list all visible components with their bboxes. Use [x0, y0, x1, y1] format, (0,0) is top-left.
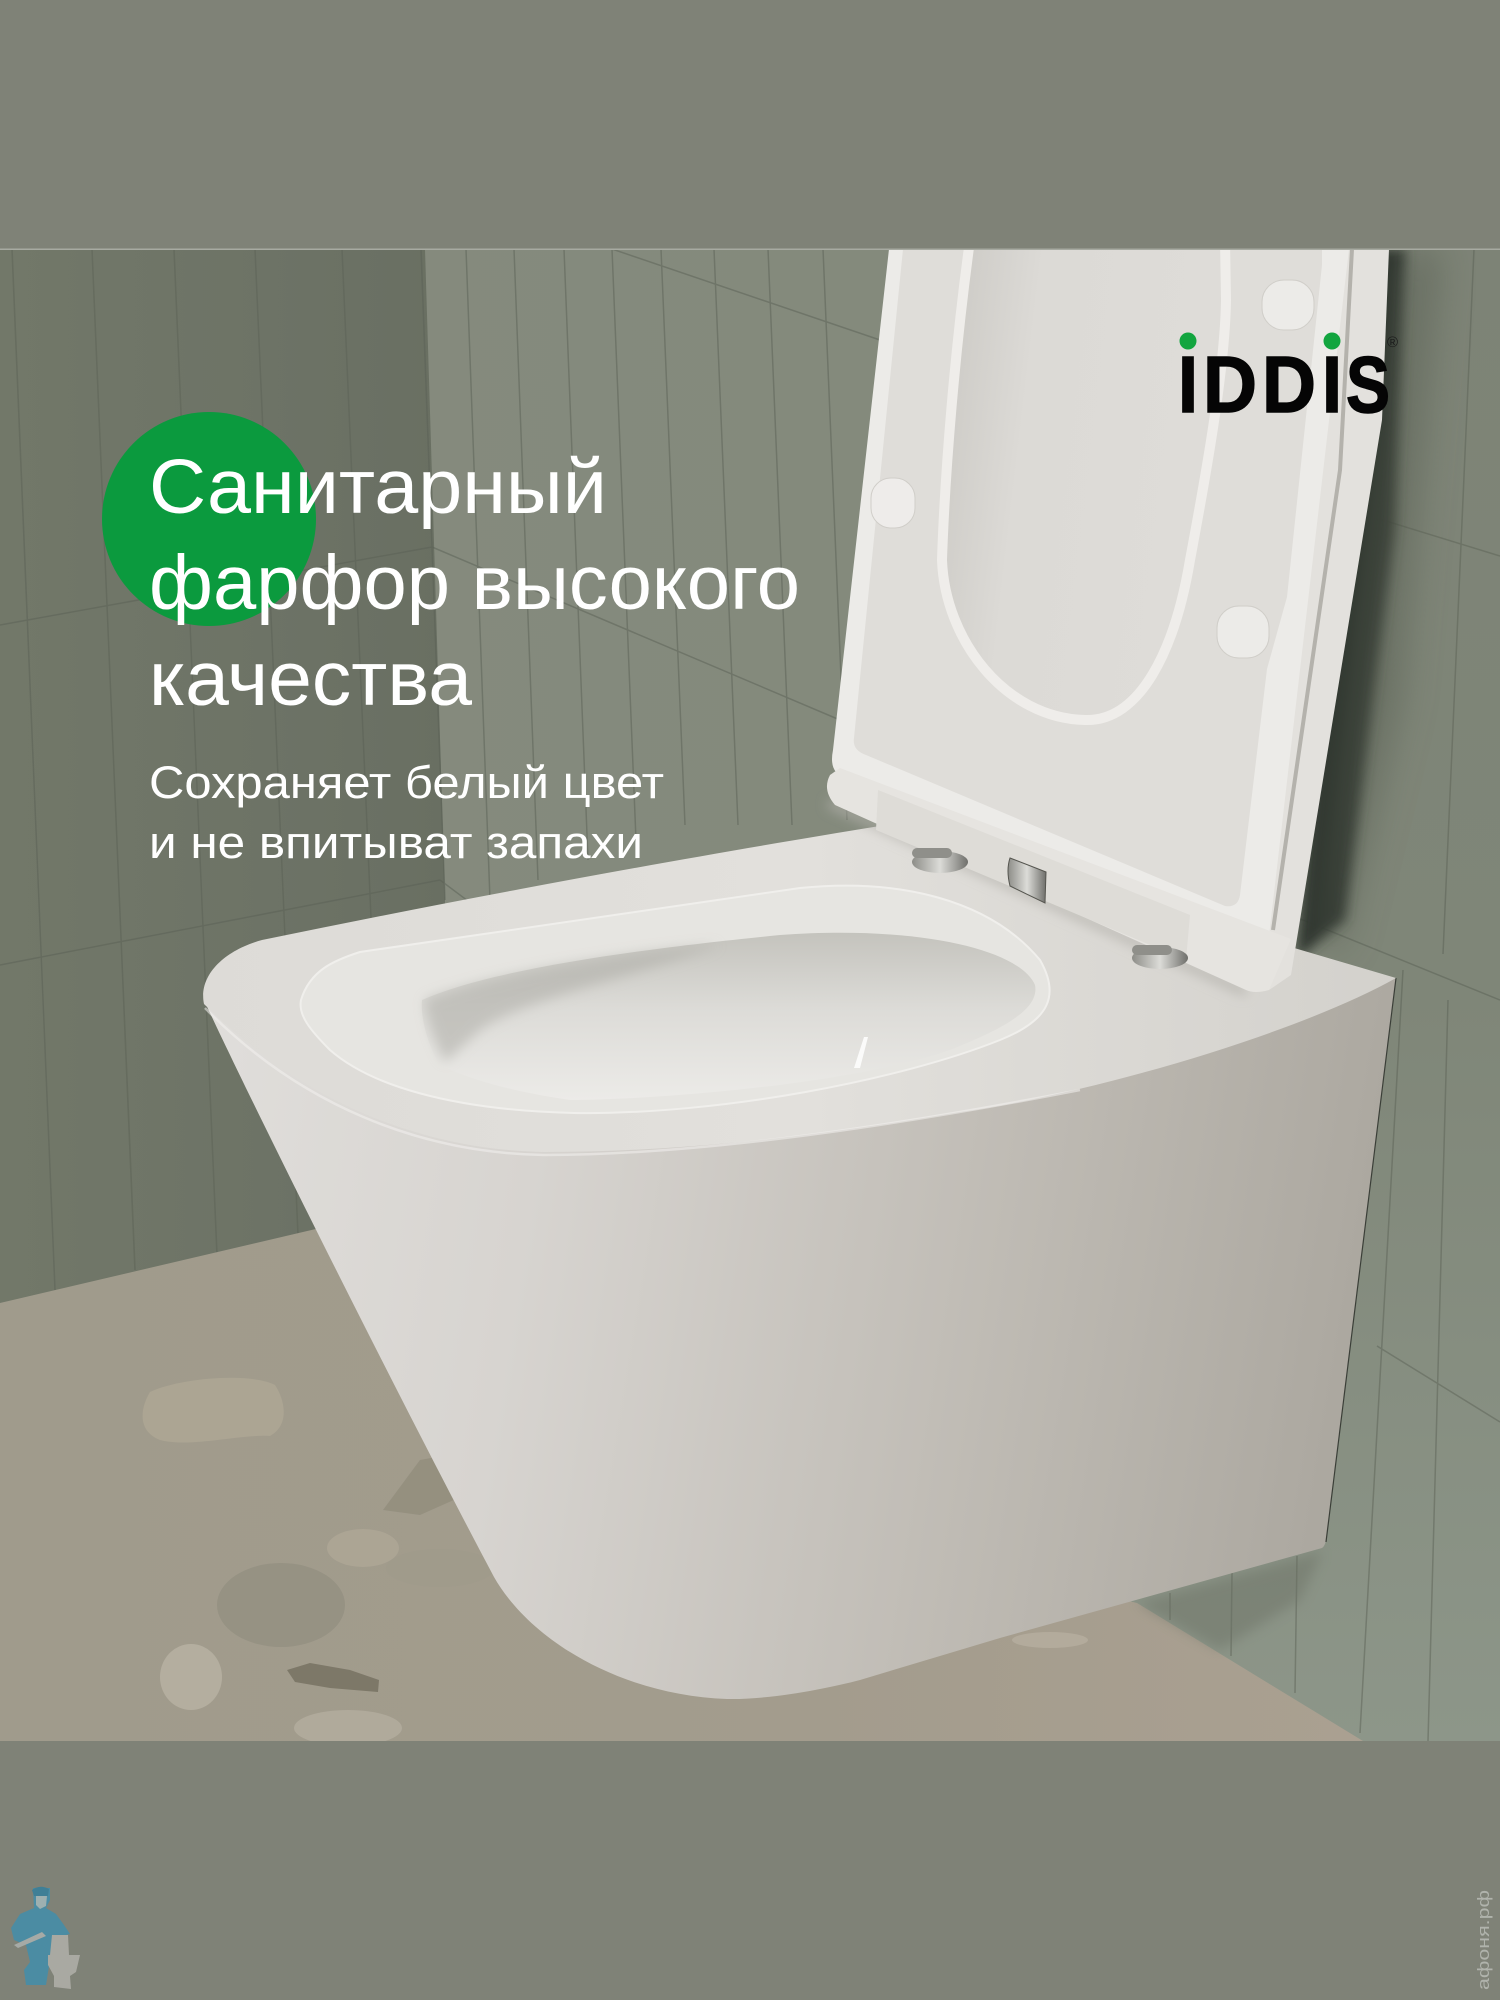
shadow behind lid [1296, 249, 1406, 960]
brand logo: I [1322, 340, 1342, 429]
bowl opening [301, 886, 1050, 1113]
green circle accent [102, 412, 316, 626]
brand logo [1178, 332, 1398, 429]
body right contour [1326, 978, 1396, 1542]
left wall in shadow [0, 249, 445, 1310]
wall tile joints [0, 249, 1500, 1741]
chrome clip [1008, 858, 1046, 903]
heading: Санитарный [149, 444, 607, 530]
scene top edge [0, 248, 1500, 250]
toilet rim [203, 826, 1396, 1152]
bottom band [0, 1741, 1500, 2000]
heading: качества [149, 636, 472, 722]
lid face [832, 249, 1349, 945]
plumber mascot icon [11, 1887, 80, 1989]
brand logo: D [1203, 340, 1257, 429]
lid bumper left [871, 478, 915, 528]
hinge bar shade [876, 790, 1190, 960]
heading: фарфор высокого [149, 540, 800, 626]
brand logo: I [1178, 340, 1198, 429]
subheading: и не впитыват запахи [149, 817, 643, 868]
lid opening [942, 240, 1226, 720]
rim highlight [205, 1008, 1080, 1155]
brand logo: S [1346, 340, 1390, 429]
shadow under toilet [1143, 1556, 1316, 1648]
photo scene [0, 240, 1500, 1746]
subheading [149, 757, 664, 868]
chrome hinge right [1132, 945, 1188, 969]
lid recess [854, 249, 1322, 906]
top band [0, 0, 1500, 249]
lid side groove [1273, 249, 1352, 930]
water glint [854, 1037, 868, 1068]
website watermark: афоня.рф [1474, 1890, 1493, 1990]
lid bumper top [1262, 280, 1314, 330]
floor [0, 1228, 1363, 1746]
subheading: Сохраняет белый цвет [149, 757, 664, 808]
lid hinge bar [827, 768, 1291, 992]
brand logo: ® [1387, 334, 1398, 351]
chrome hinge left [912, 848, 968, 873]
heading [149, 444, 800, 722]
soft shadow on wall [1320, 249, 1440, 950]
bowl interior [422, 932, 1036, 1018]
brand logo: D [1262, 340, 1316, 429]
lid bumper right [1217, 606, 1269, 658]
lid hinge shadow on rim [829, 803, 1246, 992]
lid side edge [1262, 249, 1389, 990]
back wall [426, 250, 743, 903]
toilet body [204, 978, 1396, 1699]
bowl back shadow [424, 944, 690, 1061]
right wall section [1132, 1479, 1500, 1741]
